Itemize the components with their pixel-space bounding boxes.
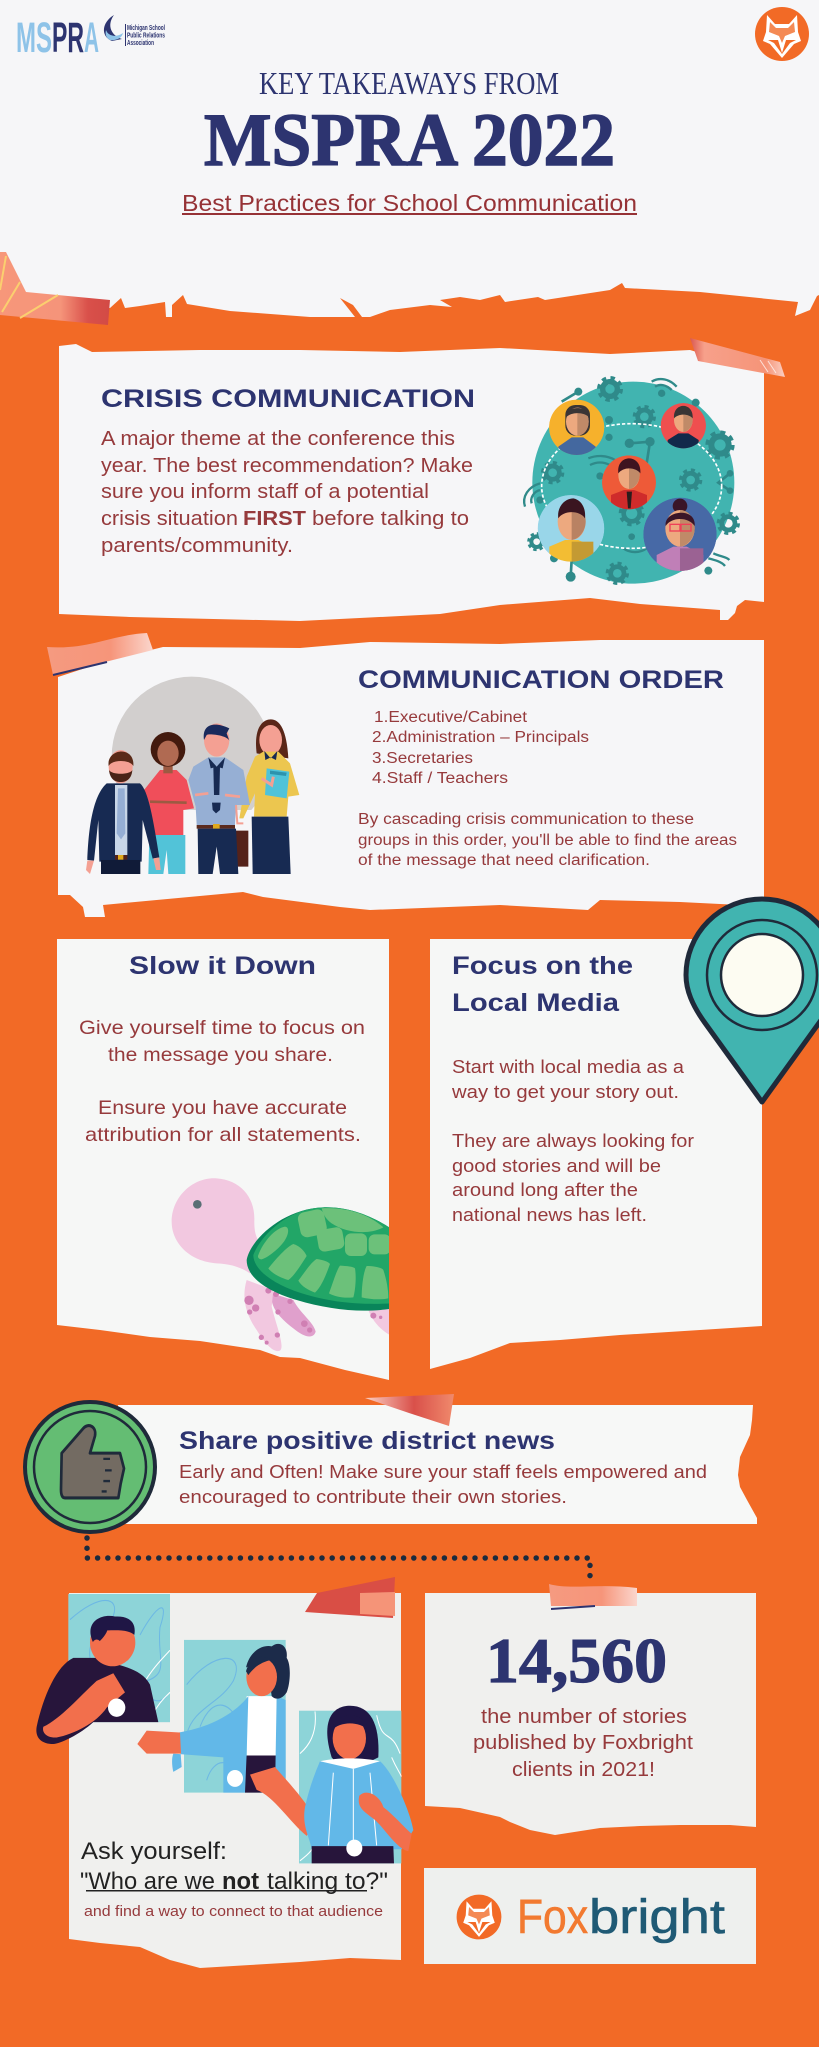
person: man in dark shirt (36, 1616, 158, 1744)
person: woman in striped top (250, 1706, 413, 1863)
heading: Share positive district news (179, 1427, 555, 1455)
dotted connector (87, 1538, 590, 1582)
heading (452, 952, 633, 1017)
logo: MSPRA: Public Relations (127, 30, 165, 40)
tape (365, 1394, 454, 1426)
panel: story statistic (425, 1584, 756, 1835)
header background with torn edge (0, 0, 819, 317)
grey arch backdrop (112, 676, 264, 810)
panel background (59, 344, 764, 621)
heading: COMMUNICATION ORDER (358, 666, 724, 694)
panel: crisis communication (59, 338, 785, 621)
heading: Slow it Down (129, 952, 316, 980)
question (80, 1868, 388, 1895)
big number: 14,560 (486, 1625, 667, 1696)
person: man in blue shirt (188, 723, 250, 874)
panel: share positive news (25, 1394, 757, 1532)
icon: location pin (686, 899, 819, 1102)
decorative tape: top left (0, 252, 110, 325)
logo: MSPRA: A (84, 14, 99, 62)
body text: around long after the (452, 1179, 638, 1200)
body text: year. The best recommendation? Make (101, 455, 473, 477)
avatar: man red (661, 403, 706, 450)
heading: Local Media (452, 989, 620, 1017)
person: woman in blue jacket (137, 1644, 290, 1793)
panel: focus on the local media (430, 939, 762, 1369)
panel background (118, 1405, 757, 1524)
caption: and find a way to connect to that audience (84, 1904, 383, 1920)
numbered list: 2.Administration – Principals (372, 729, 589, 746)
illustration: turtle (172, 1178, 393, 1351)
panel background (424, 1868, 756, 1964)
panel background (425, 1593, 756, 1835)
body text: before talking to (312, 508, 469, 530)
logo: MSPRA: Michigan School (127, 23, 165, 32)
panel: foxbright logo (424, 1868, 756, 1964)
ask yourself text: Ask yourself: (81, 1838, 227, 1865)
person: woman in red (144, 732, 194, 874)
header section (0, 0, 819, 325)
tape (47, 633, 153, 675)
body text: Start with local media as a (452, 1056, 685, 1077)
panel background (430, 939, 762, 1369)
subtitle: Best Practices for School Communication (182, 190, 637, 216)
body text: national news has left. (452, 1204, 647, 1225)
avatar: woman yellow (549, 400, 604, 457)
question: not (222, 1868, 259, 1895)
logo: MSPRA: PR (52, 14, 84, 62)
body text: They are always looking for (452, 1130, 694, 1151)
body text: attribution for all statements. (85, 1124, 361, 1146)
body text: crisis situation (101, 508, 238, 530)
tape (305, 1577, 395, 1618)
question: talking to?" (267, 1868, 388, 1895)
body text (451, 1056, 694, 1225)
numbered list: 1.Executive/Cabinet (374, 709, 528, 726)
avatar: man light blue (538, 495, 604, 567)
panel background (69, 1593, 401, 1968)
paragraph: of the message that need clarification. (358, 852, 650, 869)
panel: communication order (47, 633, 764, 917)
caption: published by Foxbright (473, 1732, 693, 1754)
panel background (57, 939, 389, 1380)
paragraph: By cascading crisis communication to these (358, 811, 694, 828)
body text: A major theme at the conference this (101, 428, 455, 450)
body text (101, 428, 473, 557)
icon: fox badge (755, 7, 809, 61)
numbered list (372, 709, 589, 787)
body text: the message you share. (108, 1044, 333, 1066)
person: man in suit (86, 750, 161, 874)
body text: parents/community. (101, 535, 293, 557)
paragraph: groups in this order, you'll be able to find the areas (358, 832, 737, 849)
caption (473, 1706, 693, 1781)
wordmark (517, 1891, 725, 1944)
logo: MSPRA: Association (127, 38, 154, 47)
icon: thumbs up (25, 1402, 155, 1532)
illustration: people network globe (524, 378, 738, 584)
panel: ask yourself (36, 1577, 413, 1968)
title: MSPRA 2022: MSPRA 2022 (204, 99, 615, 182)
body text: way to get your story out. (451, 1081, 679, 1102)
body text: Ensure you have accurate (98, 1097, 347, 1119)
body text (179, 1461, 707, 1507)
logo: MSPRA: MS (16, 14, 52, 62)
body text (79, 1017, 365, 1146)
logo: MSPRA (16, 14, 165, 62)
body text: FIRST (243, 508, 306, 530)
avatar: woman blue (643, 498, 717, 573)
body text: good stories and will be (452, 1155, 661, 1176)
person: woman in yellow (239, 719, 299, 874)
numbered list: 4.Staff / Teachers (372, 770, 508, 787)
icon: fox (457, 1895, 501, 1939)
numbered list: 3.Secretaries (372, 750, 473, 767)
title: key takeaways: KEY TAKEAWAYS FROM (259, 65, 559, 101)
body text: Early and Often! Make sure your staff feels empowered and (179, 1461, 707, 1482)
wordmark: bright (589, 1891, 725, 1944)
tape (549, 1584, 637, 1609)
teal panels (68, 1594, 401, 1863)
panel: slow it down (57, 939, 393, 1380)
body text: Give yourself time to focus on (79, 1017, 365, 1039)
tape (690, 338, 785, 377)
illustration: four colleagues (86, 677, 299, 874)
body text: encouraged to contribute their own stories. (179, 1486, 567, 1507)
illustration: three people (36, 1594, 413, 1863)
paragraph (358, 811, 737, 869)
avatar: man centre (602, 455, 656, 510)
caption: clients in 2021! (512, 1759, 655, 1781)
heading: Focus on the (452, 952, 633, 980)
panel background (58, 640, 764, 917)
body text: sure you inform staff of a potential (101, 481, 429, 503)
heading: CRISIS COMMUNICATION (101, 385, 475, 413)
caption: the number of stories (481, 1706, 687, 1728)
wordmark: Fox (517, 1891, 588, 1944)
question: "Who are we (80, 1868, 215, 1895)
